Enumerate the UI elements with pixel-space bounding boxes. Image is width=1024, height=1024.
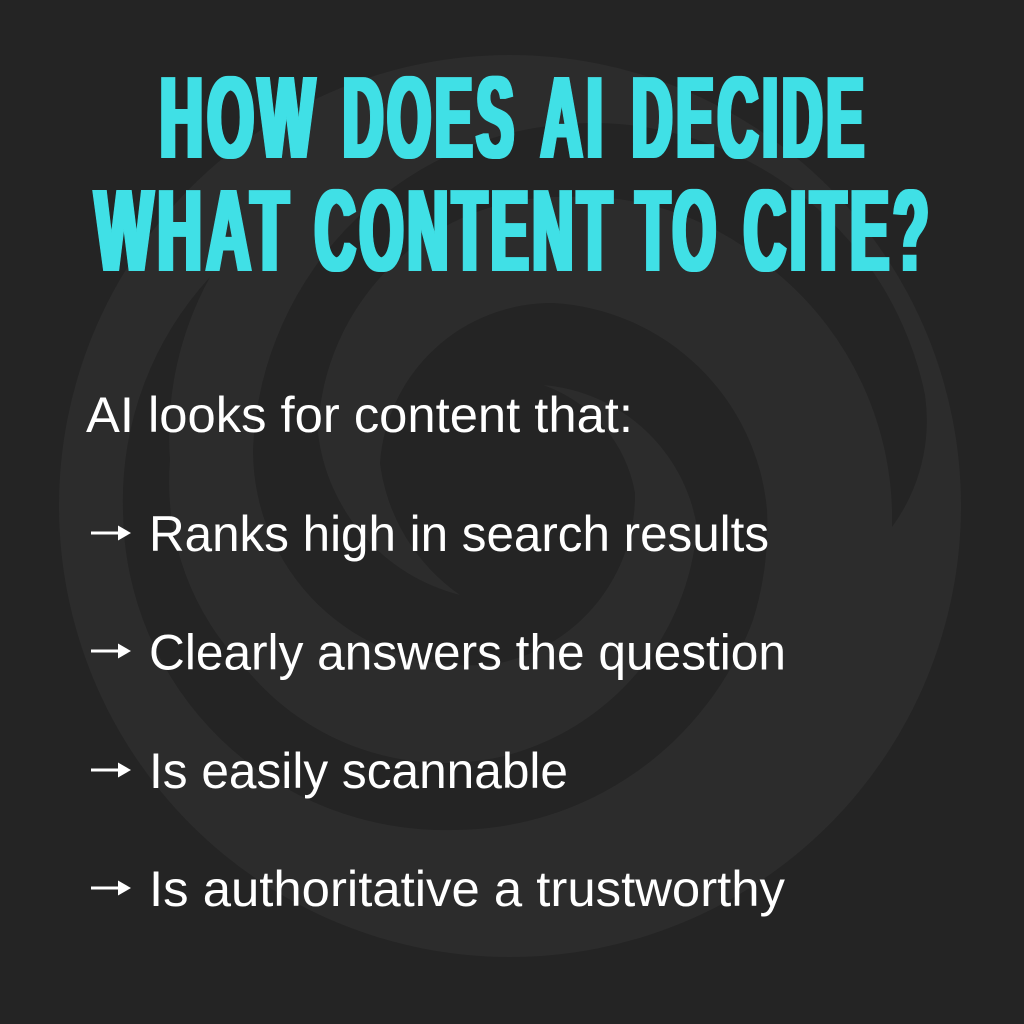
title (95, 52, 933, 296)
list item 1: Ranks high in search results (149, 506, 769, 562)
arrow icon 1 (91, 526, 131, 540)
title line 2: CONTENT (315, 166, 616, 296)
list item 3: Is easily scannable (149, 743, 568, 799)
title line 1: DOES (343, 52, 518, 182)
arrow icon 2 (91, 644, 131, 658)
background spiral watermark (59, 55, 961, 957)
arrow icon 4 (91, 880, 131, 896)
title line 1 (160, 52, 868, 182)
title line 1: AI (541, 52, 607, 182)
title line 2: TO (636, 166, 720, 296)
title line 2: WHAT (95, 166, 293, 296)
list item 4: Is authoritative a trustworthy (149, 861, 785, 917)
list item 2: Clearly answers the question (149, 624, 786, 680)
arrow icon 3 (91, 762, 131, 778)
title line 1: HOW (160, 52, 319, 182)
intro text: AI looks for content that: (86, 387, 633, 443)
